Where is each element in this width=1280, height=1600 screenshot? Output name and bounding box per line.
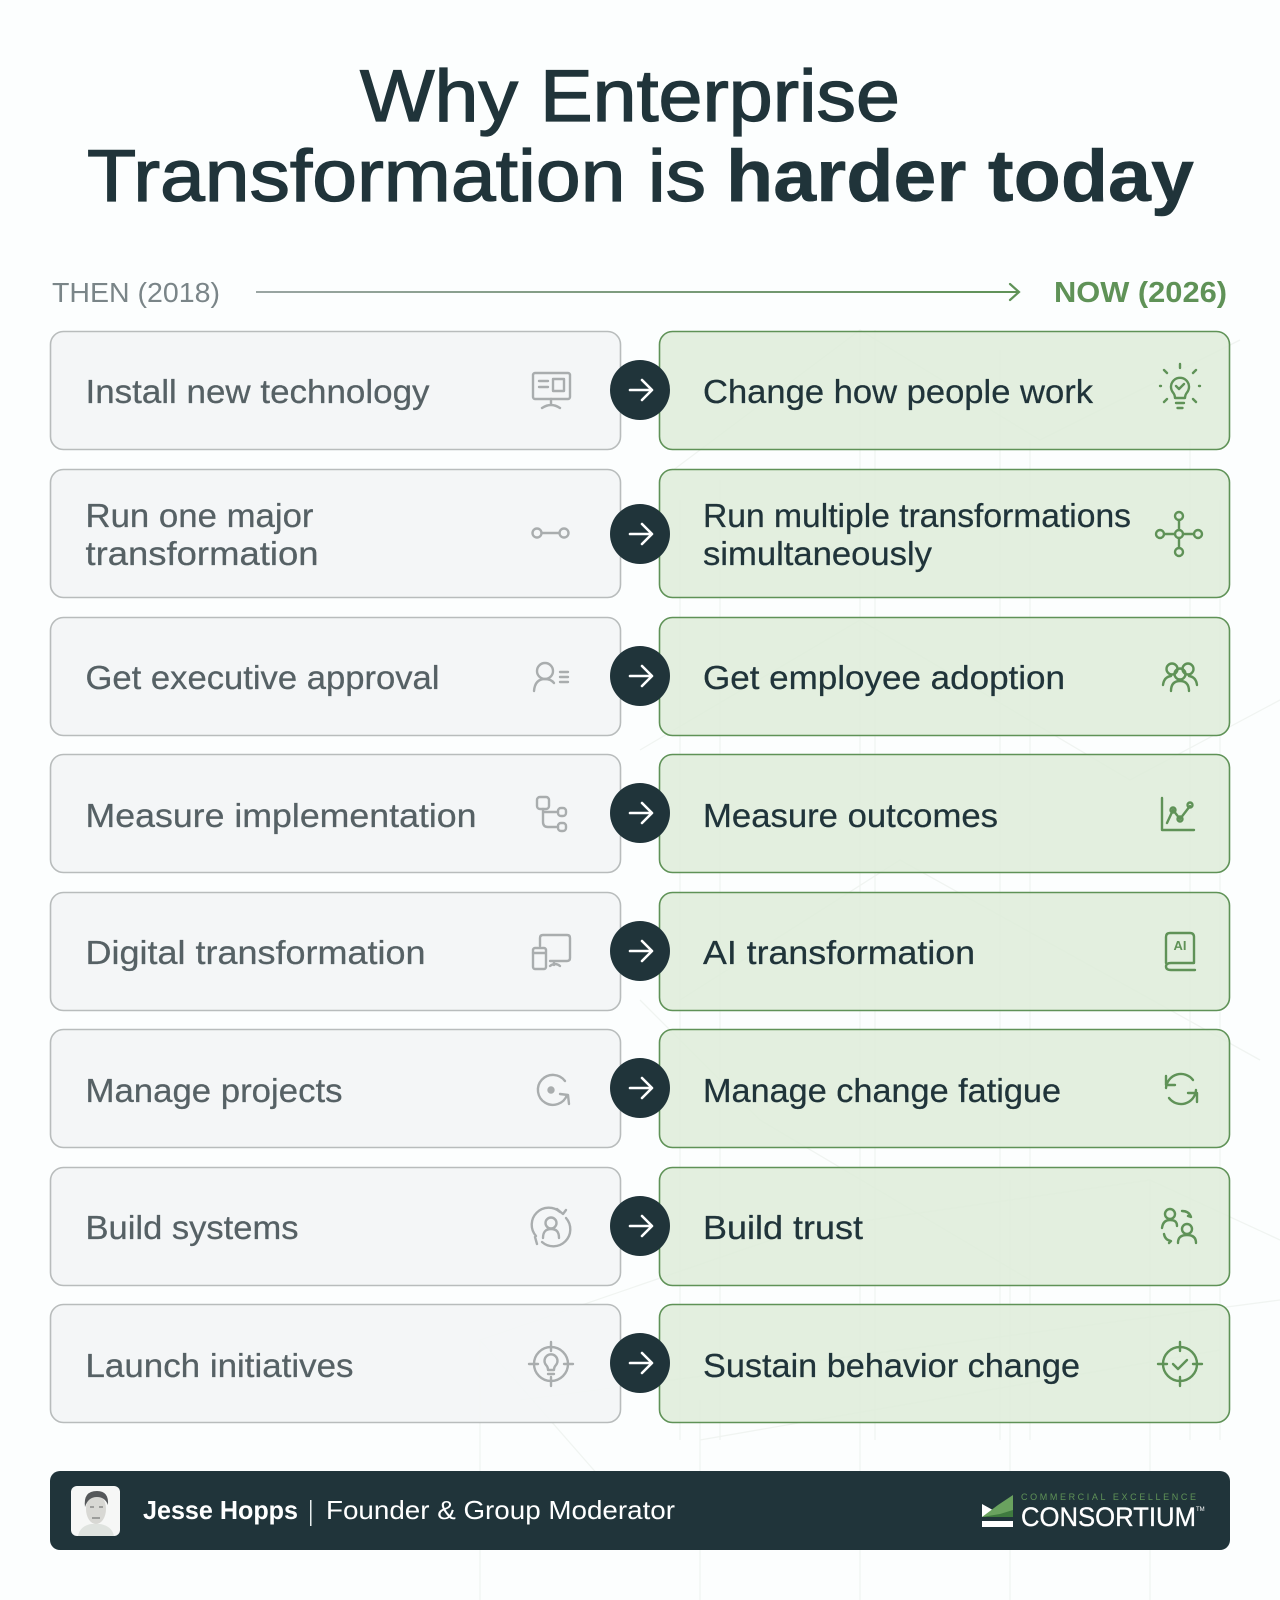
icon: light bulb bbox=[1160, 364, 1200, 408]
row 5 now card bbox=[660, 892, 1230, 1010]
icon: target cycle bbox=[538, 1075, 569, 1105]
arrow 3 bbox=[610, 646, 670, 706]
row 7 now card: Build trust bbox=[703, 1209, 863, 1246]
row 6 then card bbox=[50, 1030, 620, 1148]
icon: person in cycle bbox=[532, 1208, 570, 1246]
title bbox=[87, 56, 1194, 217]
row 3 now card bbox=[660, 618, 1230, 736]
presenter name: Jesse Hopps bbox=[143, 1495, 298, 1525]
logo: TM bbox=[1196, 1507, 1205, 1513]
icon: AI book bbox=[1166, 933, 1195, 970]
icon: AI book: AI bbox=[1174, 938, 1186, 953]
row 5 then card: Digital transformation bbox=[86, 934, 426, 971]
icon: target with check bbox=[1158, 1342, 1202, 1386]
icon: linked nodes bbox=[532, 528, 568, 538]
arrow 2 bbox=[610, 504, 670, 564]
row 8 now card bbox=[660, 1304, 1230, 1422]
icon: devices bbox=[533, 935, 570, 969]
icon: people exchange bbox=[1162, 1209, 1196, 1243]
icon: group of people bbox=[1163, 664, 1197, 691]
icon: line chart bbox=[1162, 798, 1194, 830]
arrow 5 bbox=[610, 921, 670, 981]
row 2 now card bbox=[660, 470, 1230, 598]
footer bar bbox=[50, 1471, 1230, 1550]
icon: target with bulb bbox=[529, 1342, 573, 1386]
row 3 then card bbox=[50, 618, 620, 736]
row 2 now card: Run multiple transformations bbox=[703, 497, 1131, 534]
row 2 now card: simultaneously bbox=[703, 535, 933, 572]
title: Why Enterprise bbox=[360, 56, 900, 137]
logo: CONSORTIUM bbox=[1021, 1502, 1196, 1532]
row 2 then card bbox=[50, 470, 620, 598]
icon: flow tree bbox=[537, 797, 566, 831]
label: now: NOW (2026) bbox=[1054, 277, 1227, 309]
icon: refresh bbox=[1166, 1074, 1197, 1104]
row 1 now card bbox=[660, 332, 1230, 450]
title: harder today bbox=[726, 136, 1194, 217]
portrait bbox=[71, 1486, 120, 1536]
row 1 now card: Change how people work bbox=[703, 373, 1094, 410]
row 2 then card: Run one major bbox=[86, 497, 314, 534]
logo: COMMERCIAL EXCELLENCE bbox=[1021, 1492, 1196, 1502]
arrow 6 bbox=[610, 1058, 670, 1118]
row 7 then card bbox=[50, 1168, 620, 1286]
row 4 now card bbox=[660, 754, 1230, 872]
row 8 then card bbox=[50, 1304, 620, 1422]
arrow 1 bbox=[610, 360, 670, 420]
row 4 then card: Measure implementation bbox=[86, 797, 476, 834]
icon: person with list bbox=[534, 663, 568, 691]
row 3 now card: Get employee adoption bbox=[703, 659, 1065, 696]
icon: presentation monitor bbox=[533, 373, 570, 408]
row 4 now card: Measure outcomes bbox=[703, 797, 998, 834]
arrow 7 bbox=[610, 1196, 670, 1256]
row 6 now card bbox=[660, 1030, 1230, 1148]
row 7 now card bbox=[660, 1168, 1230, 1286]
arrow 8 bbox=[610, 1333, 670, 1393]
row 8 now card: Sustain behavior change bbox=[703, 1347, 1080, 1384]
row 8 then card: Launch initiatives bbox=[86, 1347, 354, 1384]
timeline header bbox=[52, 277, 1227, 309]
icon: network bbox=[1156, 512, 1202, 556]
row 5 then card bbox=[50, 892, 620, 1010]
row 6 then card: Manage projects bbox=[86, 1072, 342, 1109]
row 1 then card bbox=[50, 332, 620, 450]
row 4 then card bbox=[50, 754, 620, 872]
divider and role: Founder & Group Moderator bbox=[326, 1495, 675, 1525]
row 7 then card: Build systems bbox=[86, 1209, 298, 1246]
row 6 now card: Manage change fatigue bbox=[703, 1072, 1061, 1109]
arrow 4 bbox=[610, 783, 670, 843]
logo bbox=[982, 1492, 1205, 1532]
arrow: then to now bbox=[256, 284, 1019, 300]
row 2 then card: transformation bbox=[86, 535, 318, 572]
row 1 then card: Install new technology bbox=[86, 373, 430, 410]
label: then: THEN (2018) bbox=[52, 277, 220, 308]
title: Transformation is bbox=[87, 136, 706, 217]
row 5 now card: AI transformation bbox=[703, 934, 975, 971]
row 3 then card: Get executive approval bbox=[86, 659, 440, 696]
